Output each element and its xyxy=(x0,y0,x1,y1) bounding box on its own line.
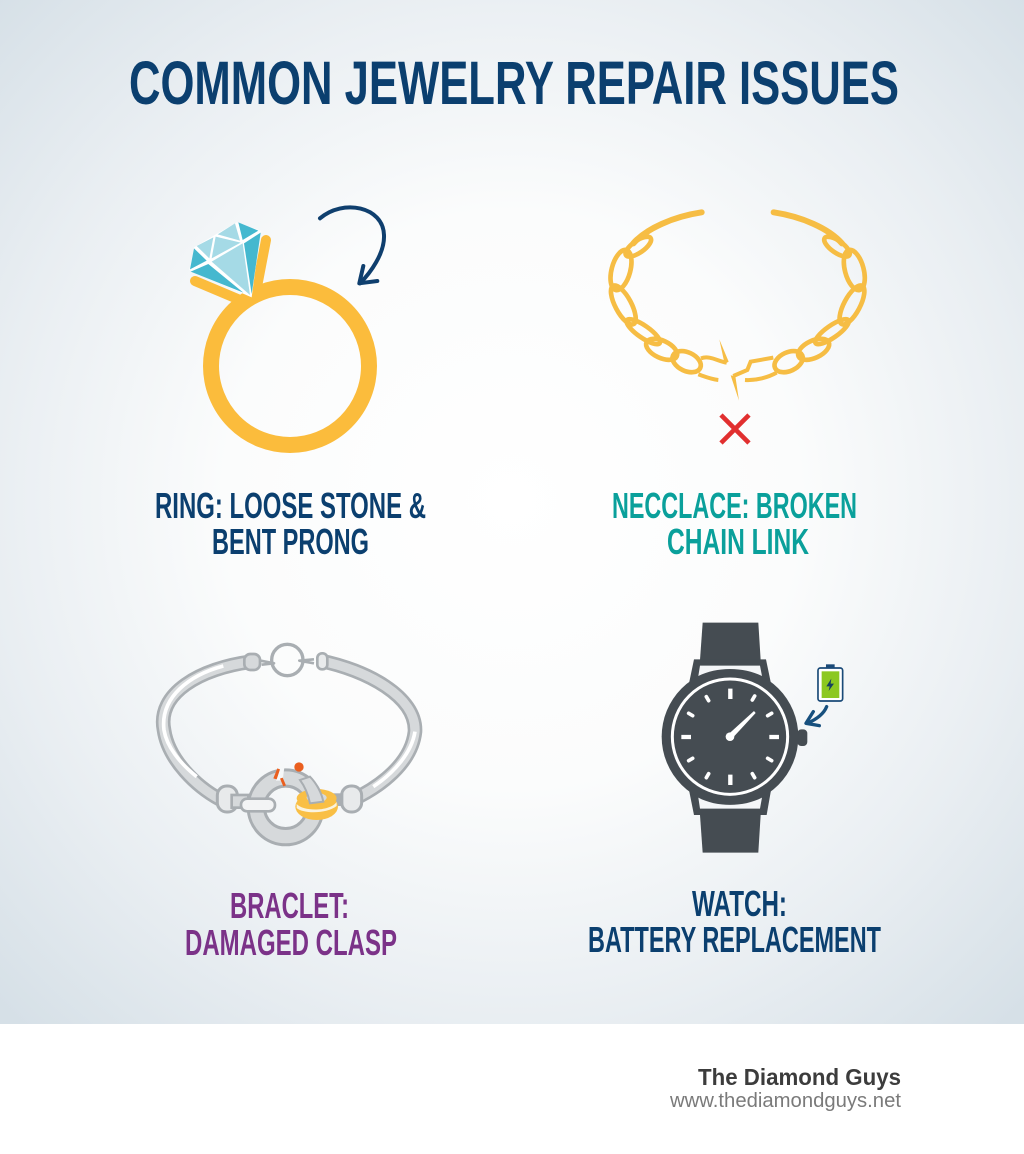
hour ticks xyxy=(681,689,779,785)
bracelet label xyxy=(185,885,397,963)
icon: broken necklace xyxy=(606,212,869,443)
footer branding: The Diamond Guys xyxy=(698,1064,901,1090)
watch label: BATTERY REPLACEMENT xyxy=(588,919,881,960)
icon: bracelet with damaged clasp xyxy=(163,644,415,837)
collars xyxy=(217,786,362,812)
watch label xyxy=(588,883,881,960)
icon: watch with battery xyxy=(662,623,843,853)
ring label xyxy=(155,485,426,562)
necklace label: CHAIN LINK xyxy=(667,521,809,562)
dial ring xyxy=(672,679,788,794)
clasp ring xyxy=(256,765,315,837)
lug gaps xyxy=(698,666,762,809)
diamond xyxy=(189,222,261,297)
gold band xyxy=(295,777,338,820)
bracelet label: BRACLET: xyxy=(230,885,349,926)
footer branding: www.thediamondguys.net xyxy=(669,1090,901,1112)
ring label: BENT PRONG xyxy=(212,521,369,562)
wrap band xyxy=(241,799,275,811)
icon: ring with loose stone xyxy=(189,207,384,445)
strap and lugs xyxy=(662,623,807,853)
footer branding xyxy=(669,1064,901,1112)
arrow to crown xyxy=(806,707,827,726)
broken link spikes xyxy=(719,339,739,401)
necklace label: NECCLACE: BROKEN xyxy=(612,485,857,526)
red x xyxy=(721,415,749,443)
watch label: WATCH: xyxy=(692,883,787,924)
arrow xyxy=(320,207,384,283)
ring band xyxy=(211,287,369,445)
necklace label xyxy=(612,485,857,562)
hands xyxy=(726,711,756,741)
bracelet label: DAMAGED CLASP xyxy=(185,922,397,963)
bangle tube xyxy=(163,661,415,799)
chain links xyxy=(606,212,869,380)
orange damage marks xyxy=(273,762,304,786)
bent prongs xyxy=(195,240,266,300)
top link ring xyxy=(261,644,314,676)
ring label: RING: LOOSE STONE & xyxy=(155,485,426,526)
battery xyxy=(818,664,843,701)
